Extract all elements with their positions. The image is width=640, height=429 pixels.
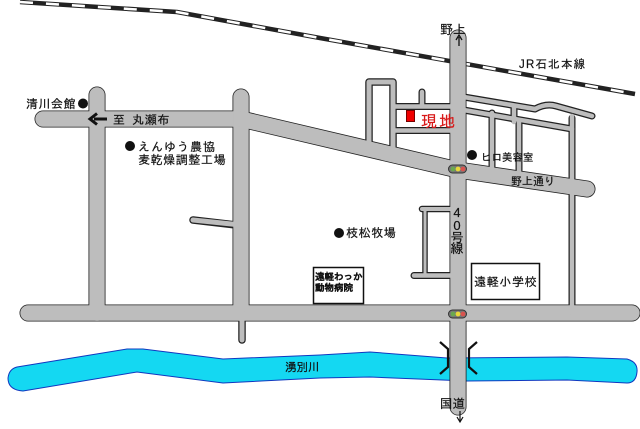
label: to Maruseppu: 丸瀬布 — [132, 113, 170, 127]
label: Route 40: 0 — [453, 218, 461, 233]
arrow: to Maruseppu — [90, 114, 107, 124]
signal: lower crossing — [448, 310, 466, 318]
label: national road: 国道 — [440, 397, 466, 411]
landmark: Kiyokawa hall: 清川会館 — [26, 97, 76, 111]
building: animal hospital: 動物病院 — [315, 282, 354, 294]
arrow: north — [456, 35, 462, 46]
building: elementary school — [472, 264, 540, 300]
building: animal hospital — [314, 268, 364, 304]
label: Nogami street: 野上通り — [511, 176, 555, 188]
label: Nogami: 野上 — [440, 22, 466, 37]
arrow: south — [457, 411, 463, 422]
label: JR line: JR石北本線 — [519, 58, 586, 71]
building: animal hospital: 遠軽わっか — [315, 271, 363, 283]
label: Yubetsu river: 湧別川 — [285, 361, 320, 374]
landmark: Engaru agricultural cooperative — [125, 140, 226, 167]
label: Route 40: 線 — [450, 241, 464, 256]
label: Route 40: 4 — [453, 205, 461, 220]
landmark: Engaru agricultural cooperative: 麦乾燥調整工場 — [138, 153, 226, 167]
railway: JR Sekihoku line — [20, 2, 635, 94]
building: elementary school: 遠軽小学校 — [474, 275, 538, 289]
site label: 現地 — [421, 114, 457, 131]
label: Route 40: 号 — [450, 230, 464, 245]
bridge — [440, 342, 477, 374]
site marker — [406, 110, 414, 122]
landmark: Hiro beauty salon — [467, 150, 534, 164]
label: to Maruseppu: 至 — [113, 113, 125, 127]
landmark: Edamatsu ranch: 枝松牧場 — [346, 226, 396, 240]
label: Route 40 — [450, 205, 464, 256]
signal: upper crossing — [448, 165, 466, 173]
landmark: Engaru agricultural cooperative: えんゆう農協 — [138, 140, 216, 154]
landmark: Hiro beauty salon: ヒロ美容室 — [481, 152, 534, 164]
river — [8, 349, 637, 391]
